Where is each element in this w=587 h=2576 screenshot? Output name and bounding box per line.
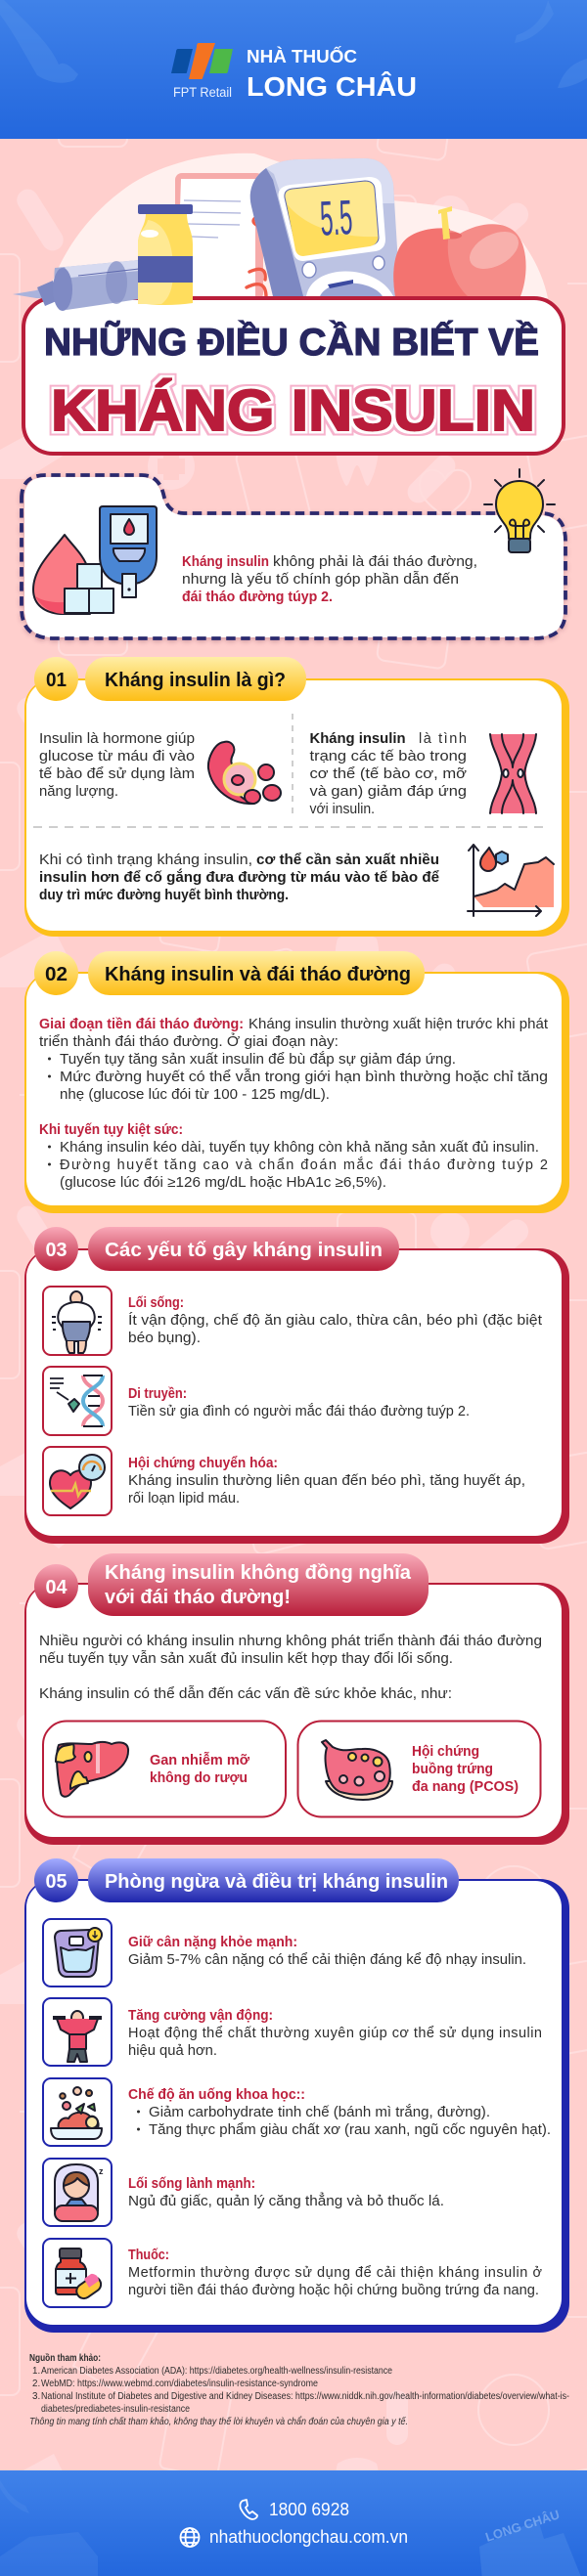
text: prediabetes stage: Kháng insulin thường xuất hiện trước khi phát (248, 1017, 548, 1032)
icon: liver (56, 1742, 128, 1797)
heading: 03 (34, 1227, 399, 1271)
text: genetics: Tiền sử gia đình có người mắc đái tháo đường tuýp 2. (128, 1403, 470, 1419)
card: PCOS (297, 1721, 540, 1816)
text: insulin resistance definition: là tình (419, 731, 467, 747)
text: healthy lifestyle (128, 2176, 444, 2209)
text: exercise: Hoạt động thể chất thường xuyên giúp cơ thể sử dụng insulin (128, 2026, 542, 2041)
panel: intro callout (22, 469, 565, 638)
heading: 05: Phòng ngừa và điều trị kháng insulin (105, 1870, 448, 1893)
text: metabolic syndrome: rối loạn lipid máu. (128, 1491, 240, 1506)
title line 1: NHỮNG ĐIỀU CẦN BIẾT VỀ (44, 321, 539, 364)
intro text: đái tháo đường túyp 2. (182, 589, 333, 605)
heading: 05: 05 (45, 1870, 67, 1893)
intro text: nhưng là yếu tố chính góp phần dẫn đến (182, 571, 459, 588)
text: prediabetes stage: Tuyến tụy tăng sản xuất insulin để bù đắp sự giảm đáp ứng. (60, 1051, 456, 1068)
icon: healthy food bowl (43, 2078, 112, 2146)
card: PCOS: Hội chứng (412, 1744, 479, 1760)
icon: red blood cells (208, 742, 281, 804)
text: insulin resistance definition: và gan) giảm đáp ứng (309, 784, 467, 800)
heading: 05 (34, 1858, 459, 1902)
intro text: không phải là đái tháo đường, (273, 554, 477, 570)
text: healthy weight (128, 1935, 526, 1968)
icon: rising blood sugar chart (468, 845, 554, 916)
text: metabolic syndrome: Kháng insulin thường liên quan đến béo phì, tăng huyết áp, (128, 1473, 525, 1489)
text: prediabetes stage: nhẹ (glucose lúc đói từ 100 - 125 mg/dL). (60, 1087, 330, 1103)
text: section 04 body (39, 1634, 542, 1702)
text: pancreas exhaustion stage (39, 1122, 548, 1191)
icon: medicine bottle (43, 2239, 112, 2307)
text: healthy weight: Giữ cân nặng khỏe mạnh: (128, 1935, 297, 1950)
text: resistance effect: insulin hơn để cố gắng đưa đường từ máu vào tế bào để (39, 868, 439, 886)
icon: heart with gauge (43, 1447, 112, 1515)
panel: section 04 (24, 1553, 569, 1845)
icon: person lifting dumbbells (43, 1998, 112, 2066)
text: pancreas exhaustion stage: Đường huyết tăng cao và chẩn đoán mắc đái tháo đường tuýp 2 (60, 1157, 548, 1173)
panel: section 02 (24, 951, 569, 1213)
heading: 02: Kháng insulin và đái tháo đường (105, 963, 411, 985)
title line 2: KHÁNG INSULIN (51, 378, 535, 443)
text: medication: Thuốc: (128, 2248, 169, 2263)
syringe (13, 260, 139, 311)
header band (0, 0, 587, 139)
text: pancreas exhaustion stage: Khi tuyến tụy kiệt sức: (39, 1122, 183, 1138)
text: lifestyle: Lối sống: (128, 1295, 184, 1311)
icon: light bulb (484, 469, 555, 552)
references: 2. (32, 2379, 40, 2389)
text: genetics (128, 1386, 470, 1419)
heading: 02 (34, 951, 425, 995)
heading: 03: Các yếu tố gây kháng insulin (105, 1239, 383, 1261)
text: insulin resistance definition: Kháng insulin (309, 731, 405, 747)
icon: DNA (43, 1367, 112, 1435)
heading: 03: 03 (45, 1239, 67, 1261)
references: American Diabetes Association (ADA): https://diabetes.org/health-wellness/insulin-resistance (41, 2366, 392, 2377)
notebook (175, 173, 266, 300)
heading: 04: 04 (45, 1576, 68, 1598)
text: exercise: hiệu quả hơn. (128, 2043, 217, 2059)
website: nhathuoclongchau.com.vn (209, 2526, 408, 2547)
icon: sleeping person (43, 2159, 112, 2226)
intro text (182, 554, 477, 605)
text: resistance effect (39, 852, 439, 903)
text: insulin resistance definition: với insulin. (309, 802, 375, 817)
card: PCOS: buồng trứng (412, 1762, 493, 1777)
references: WebMD: https://www.webmd.com/diabetes/insulin-resistance-syndrome (41, 2379, 318, 2389)
text: metabolic syndrome: Hội chứng chuyển hóa: (128, 1456, 278, 1471)
text: resistance effect: duy trì mức đường huyết bình thường. (39, 888, 289, 903)
card: fatty liver: Gan nhiễm mỡ (150, 1752, 250, 1768)
card: fatty liver (43, 1721, 286, 1816)
icon: ovary (322, 1740, 392, 1800)
text: prediabetes stage: Giai đoạn tiền đái tháo đường: (39, 1017, 244, 1032)
text: genetics: Di truyền: (128, 1386, 187, 1402)
text: prediabetes stage (39, 1017, 548, 1103)
phone number: 1800 6928 (269, 2499, 349, 2519)
panel: section 01 (24, 657, 569, 937)
text: healthy lifestyle: Ngủ đủ giấc, quản lý căng thẳng và bỏ thuốc lá. (128, 2192, 444, 2209)
text: section 04 body: nếu tuyến tụy vẫn sản xuất đủ insulin kết hợp thay đổi lối sống. (39, 1650, 453, 1667)
references (29, 2353, 569, 2427)
icon: phone (240, 2500, 257, 2519)
text: pancreas exhaustion stage: Kháng insulin kéo dài, tuyến tụy không còn khả năng sản xuất đủ insulin. (60, 1140, 539, 1156)
logo: FPT Retail (171, 43, 233, 100)
vial (138, 204, 193, 305)
text: exercise (128, 2008, 542, 2059)
heading: 01: 01 (46, 669, 67, 691)
footer band: LONG CHÂU (483, 2507, 562, 2545)
text: healthy weight: Giảm 5-7% cân nặng có thể cải thiện đáng kể độ nhạy insulin. (128, 1952, 526, 1968)
text: exercise: Tăng cường vận động: (128, 2008, 273, 2024)
text: diet: Chế độ ăn uống khoa học:: (128, 2087, 305, 2103)
footer band (0, 2470, 587, 2576)
text: section 04 body: Nhiều người có kháng insulin nhưng không phát triển thành đái tháo đường (39, 1634, 542, 1649)
title box (23, 298, 564, 454)
text: insulin resistance definition: cơ thể (tế bào cơ, mỡ (309, 766, 468, 782)
text: diet: Tăng thực phẩm giàu chất xơ (rau xanh, ngũ cốc nguyên hạt). (149, 2122, 551, 2138)
glucose meter: 5.5 (319, 190, 354, 246)
text: insulin definition: năng lượng. (39, 784, 118, 800)
text: prediabetes stage: triển thành đái tháo đường. Ở giai đoạn này: (39, 1032, 339, 1050)
brand name (247, 46, 417, 102)
heading: 04: Kháng insulin không đồng nghĩa (105, 1561, 412, 1584)
text: medication: người tiền đái tháo đường hoặc hội chứng buồng trứng đa nang. (128, 2283, 539, 2298)
text: insulin definition (39, 731, 195, 800)
text: medication: Metformin thường được sử dụng để cải thiện kháng insulin ở (128, 2265, 542, 2281)
text: lifestyle: Ít vận động, chế độ ăn giàu calo, thừa cân, béo phì (đặc biệt (128, 1312, 542, 1329)
text: lifestyle: béo bụng). (128, 1331, 201, 1346)
logo: FPT Retail: FPT Retail (173, 85, 232, 100)
text: lifestyle (128, 1295, 542, 1346)
heading: 01: Kháng insulin là gì? (105, 669, 286, 691)
text: insulin definition: glucose từ máu đi vào (39, 749, 195, 764)
text: metabolic syndrome (128, 1456, 525, 1506)
text: healthy lifestyle: Lối sống lành mạnh: (128, 2176, 255, 2192)
apple (393, 206, 526, 296)
references: 1. (32, 2366, 40, 2377)
text: pancreas exhaustion stage: (glucose lúc đói ≥126 mg/dL hoặc HbA1c ≥6,5%). (60, 1175, 386, 1191)
intro text: Kháng insulin (182, 554, 269, 570)
heading: 04 (34, 1553, 429, 1616)
heading: 01 (34, 657, 306, 701)
brand name: LONG CHÂU (247, 71, 417, 102)
icon: sleeping person: z (99, 2166, 104, 2176)
brand name: NHÀ THUỐC (247, 46, 357, 66)
card: PCOS: đa nang (PCOS) (412, 1779, 519, 1795)
references: Nguồn tham khảo: (29, 2353, 101, 2364)
icon: blood drop and sugar cubes with glucose meter (33, 506, 157, 614)
text: insulin resistance definition (309, 731, 468, 817)
text: prediabetes stage: Mức đường huyết có thể vẫn trong giới hạn bình thường hoặc chỉ tăng (60, 1069, 548, 1085)
icon: muscle fibres (490, 734, 537, 813)
references: Thông tin mang tính chất tham khảo, không thay thế lời khuyên và chẩn đoán của chuyên gia y tế. (29, 2417, 408, 2427)
text: diet (128, 2087, 551, 2138)
text: diet: Giảm carbohydrate tinh chế (bánh mì trắng, đường). (149, 2104, 490, 2120)
icon: overweight body (43, 1287, 112, 1355)
panel: section 05 (24, 1858, 569, 2333)
glucose meter (250, 158, 400, 296)
text: resistance effect: Khi có tình trạng kháng insulin, (39, 852, 252, 868)
heading: 02: 02 (45, 963, 68, 985)
references: diabetes/prediabetes-insulin-resistance (41, 2404, 190, 2415)
panel: section 03 (24, 1227, 569, 1544)
text: insulin resistance definition: trạng các tế bào trong (309, 749, 467, 764)
text: insulin definition: tế bào để sử dụng làm (39, 766, 195, 782)
card: fatty liver: không do rượu (150, 1770, 248, 1786)
heading: 04: với đái tháo đường! (105, 1586, 291, 1608)
icon: globe (180, 2528, 200, 2547)
hero illustration (47, 153, 548, 300)
icon: weighing scale (43, 1919, 112, 1987)
references: 3. (32, 2391, 40, 2402)
text: resistance effect: cơ thể cần sản xuất nhiều (256, 852, 439, 868)
text: section 04 body: Kháng insulin có thể dẫn đến các vấn đề sức khỏe khác, như: (39, 1685, 452, 1702)
text: insulin definition: Insulin là hormone giúp (39, 731, 195, 747)
text: medication (128, 2248, 542, 2298)
